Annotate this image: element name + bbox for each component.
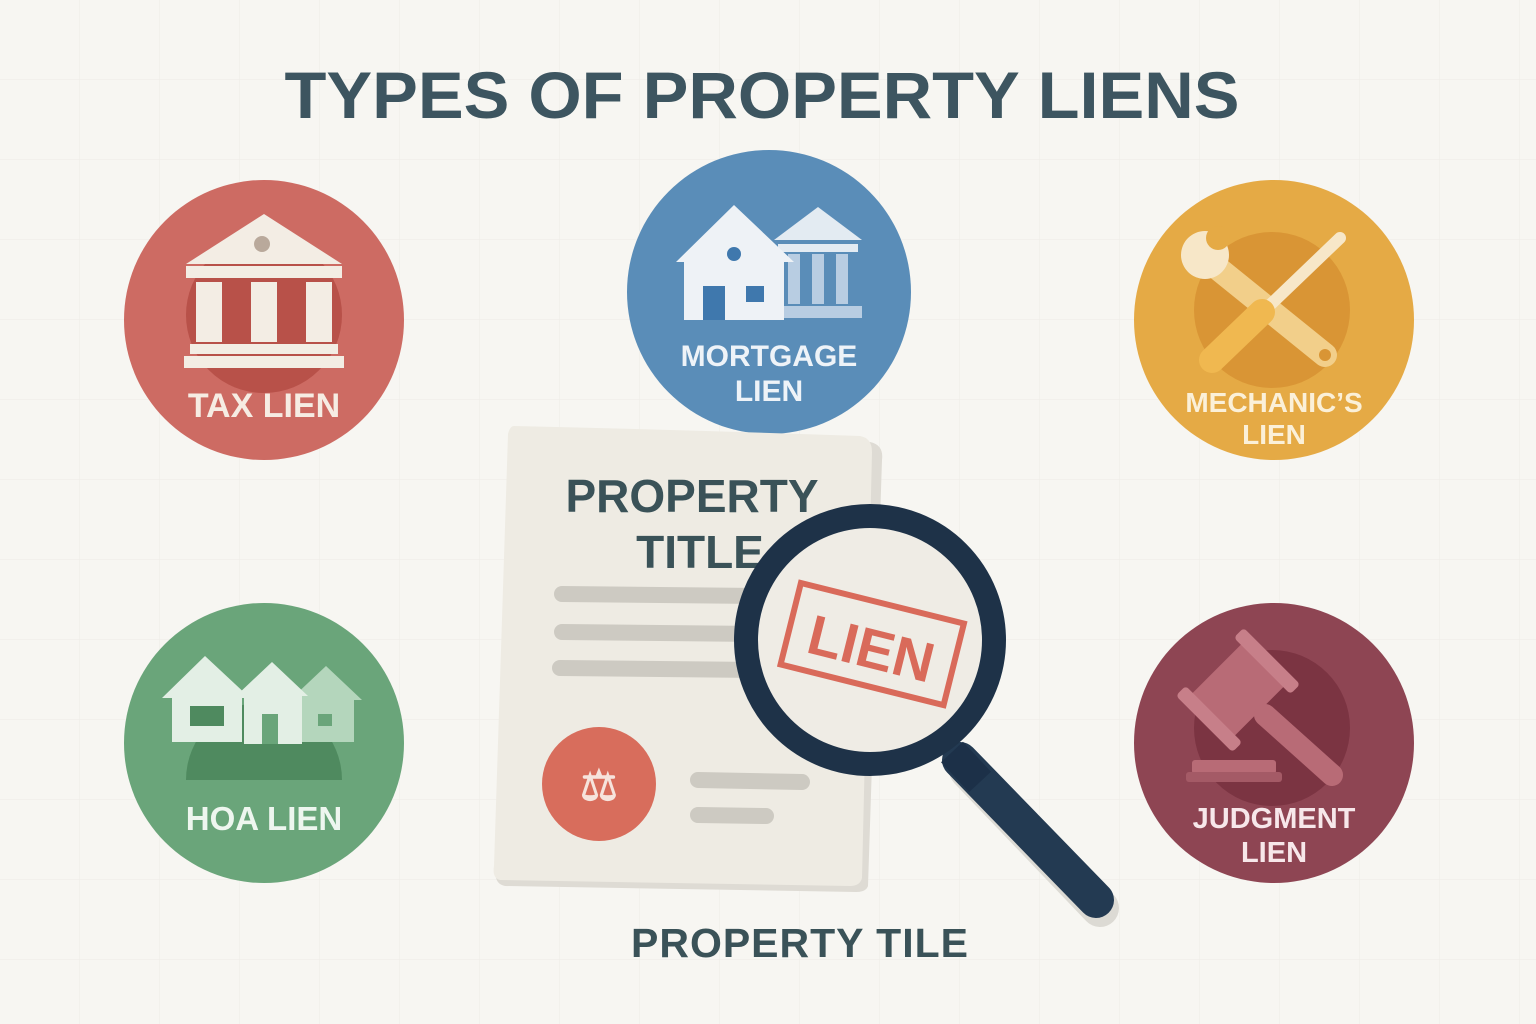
stamp: lien [781,583,964,705]
icon: houses [162,656,362,744]
panel: tax lien: TAX LIEN [188,387,340,425]
icon: bank and house [676,205,862,320]
panel: judgment lien: LIEN [1241,837,1307,869]
panel: judgment lien: JUDGMENT [1193,803,1356,835]
title: TYPES OF PROPERTY LIENS [284,58,1240,132]
icon: wrench and screwdriver [1181,226,1340,361]
icon: seal [542,727,656,841]
panel: mortgage lien: MORTGAGE [681,340,857,373]
panel: mortgage lien: LIEN [735,375,803,408]
panel: mechanic's lien: LIEN [1242,419,1306,450]
caption: property tile: PROPERTY TILE [631,920,969,966]
panel: property title document [494,426,882,892]
panel: hoa lien: HOA LIEN [186,800,342,837]
panel: mechanic's lien: MECHANIC’S [1185,387,1363,418]
heading: property title: PROPERTY [565,470,819,522]
icon: seal: ⚖ [580,762,618,809]
icon: courthouse [184,214,344,368]
panel: property title document: TITLE [636,526,764,578]
panel: tax lien [124,180,404,460]
icon: magnifying glass [746,516,1100,908]
panel: judgment lien [1134,603,1414,883]
panel: mortgage lien [627,150,911,434]
stamp: lien: LIEN [802,602,941,694]
panel: hoa lien [124,603,404,883]
panel: mechanic's lien [1134,180,1414,460]
icon: gavel [1176,628,1332,782]
